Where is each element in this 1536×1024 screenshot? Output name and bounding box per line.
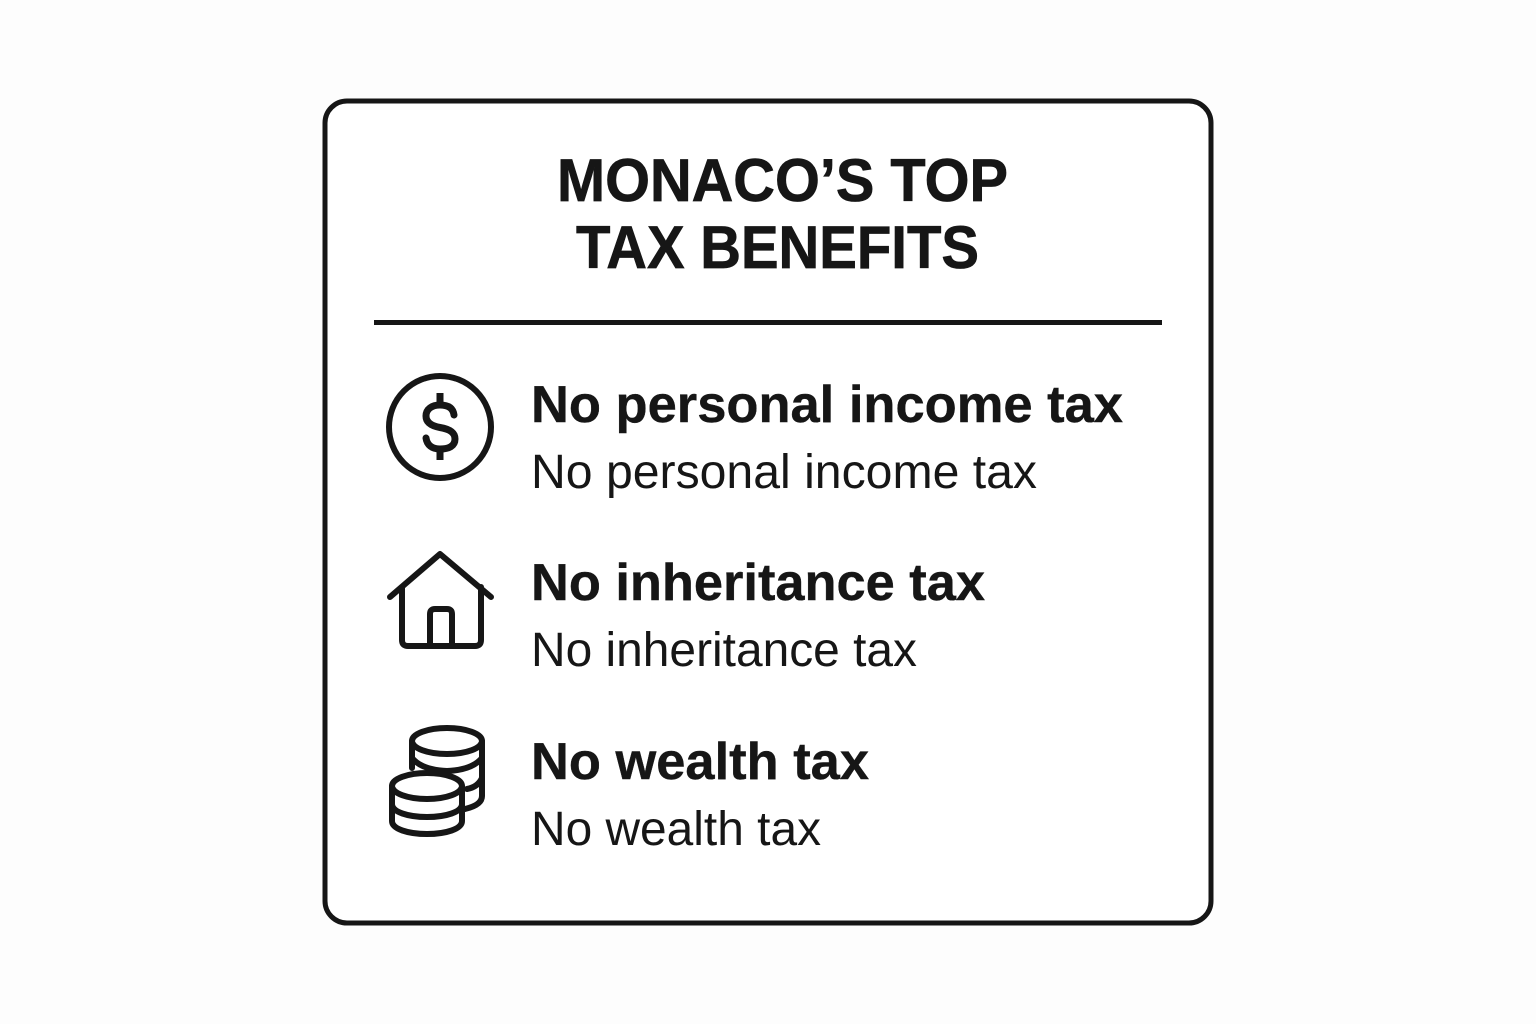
panel: tax benefits card xyxy=(325,101,1211,923)
benefit 3: wealth tax: No wealth tax xyxy=(531,733,869,791)
icon: dollar coin xyxy=(389,376,491,478)
benefit 1: income tax: No personal income tax xyxy=(531,376,1123,434)
benefit 3: wealth tax xyxy=(531,733,869,856)
benefit 2: inheritance tax xyxy=(531,554,985,677)
icon: coin stacks xyxy=(392,728,482,834)
benefit 2: inheritance tax: No inheritance tax xyxy=(531,624,917,677)
benefit 3: wealth tax: No wealth tax xyxy=(531,803,821,856)
icon: house xyxy=(390,554,491,646)
title: MONACO’S TOP xyxy=(557,147,1008,214)
benefit 1: income tax xyxy=(531,376,1123,499)
title xyxy=(557,147,1008,281)
benefit 1: income tax: No personal income tax xyxy=(531,446,1037,499)
title: TAX BENEFITS xyxy=(576,214,979,281)
benefit 2: inheritance tax: No inheritance tax xyxy=(531,554,985,612)
